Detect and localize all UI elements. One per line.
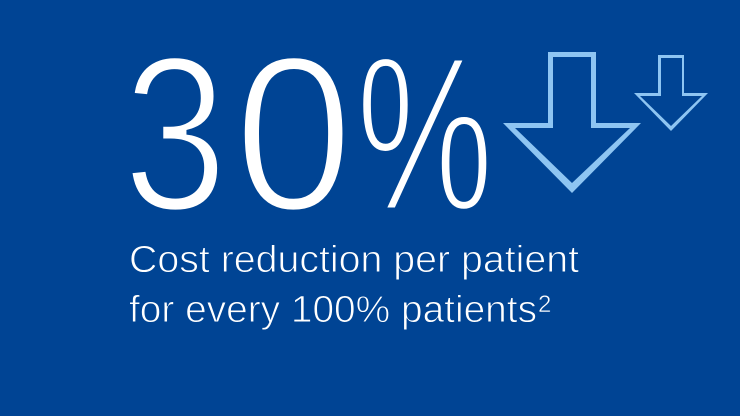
caption text: 2 [538, 291, 551, 318]
headline statistic: 30%: 3 [123, 11, 227, 257]
caption text [129, 239, 579, 331]
headline statistic: 30% [123, 11, 494, 258]
large down arrow icon [503, 52, 641, 193]
caption text: Cost reduction per patient [129, 239, 579, 281]
headline statistic: 30%: % [356, 11, 494, 258]
small down arrow icon [634, 55, 708, 131]
headline statistic: 30%: 0 [234, 11, 353, 258]
caption text: for every 100% patients [129, 289, 537, 331]
